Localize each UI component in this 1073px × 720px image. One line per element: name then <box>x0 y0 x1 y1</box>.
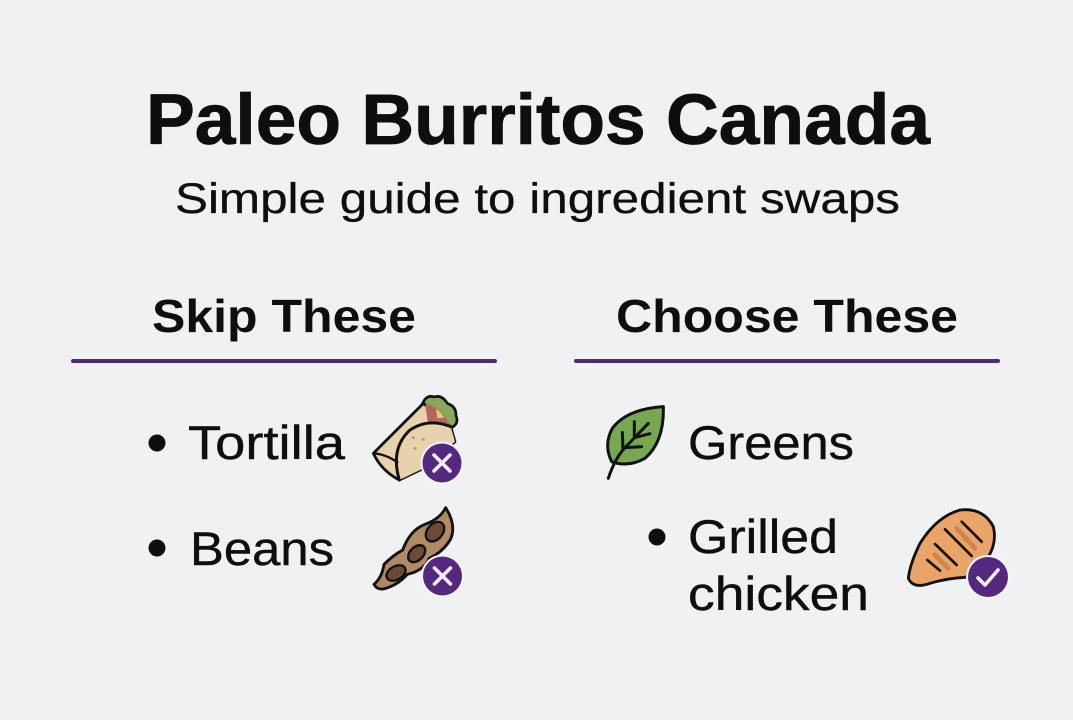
badge: cross on burrito <box>420 442 464 484</box>
icon: burrito with filling <box>373 396 457 480</box>
heading: skip these: Skip These <box>152 290 416 342</box>
item: tortilla <box>148 416 346 469</box>
item: grilled chicken: Grilled <box>688 510 838 563</box>
item: greens: Greens <box>688 416 854 469</box>
icon: grilled chicken breast <box>908 510 994 585</box>
title: Paleo Burritos Canada <box>146 81 931 160</box>
icon: leaf <box>608 407 663 478</box>
panel: choose these <box>574 290 1010 620</box>
badge: cross on beans <box>421 554 464 598</box>
subtitle: Simple guide to ingredient swaps <box>175 175 900 223</box>
item: grilled chicken <box>648 510 869 620</box>
item: tortilla: Tortilla <box>188 416 346 469</box>
badge: check on chicken <box>966 555 1010 599</box>
item: beans: Beans <box>190 522 334 575</box>
panel: skip these <box>71 290 497 598</box>
heading: choose these: Choose These <box>616 290 958 342</box>
item: grilled chicken: chicken <box>688 567 869 620</box>
icon: bean pod <box>374 508 453 589</box>
